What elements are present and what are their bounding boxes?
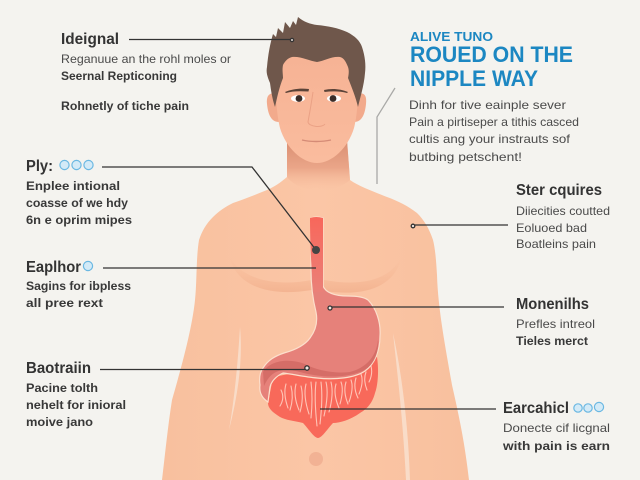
leader line	[103, 267, 316, 269]
body line 2: coasse of we hdy	[26, 196, 128, 210]
intro line 4: butbing petschent!	[409, 150, 522, 164]
callout: Baotraiin	[26, 360, 309, 429]
navel	[309, 452, 323, 466]
intro line 2: Pain a pirtiseper a tithis casced	[409, 115, 579, 129]
dot	[328, 306, 332, 310]
dot	[305, 366, 309, 370]
intro line 1: Dinh for tive eainple sever	[409, 98, 566, 112]
esophagus upper	[310, 217, 323, 292]
icon: blue ornament	[83, 261, 93, 271]
right chest	[324, 258, 401, 293]
stomach and esophagus	[260, 217, 380, 402]
neck shadow	[287, 140, 350, 190]
body: Reganuue an the rohl moles or	[61, 52, 231, 66]
title block	[409, 29, 579, 164]
callout: Ster cquires	[411, 182, 610, 251]
leader line	[415, 224, 508, 226]
dot	[411, 224, 415, 228]
heading: Ideignal	[61, 31, 119, 48]
grey bracket line	[377, 88, 395, 184]
leader line	[129, 38, 290, 40]
body: Pacine tolth	[26, 381, 98, 395]
heading: Ply:	[26, 158, 53, 175]
hair	[267, 17, 365, 107]
callout: Monenilhs	[328, 296, 595, 348]
bold line: Tieles merct	[516, 334, 588, 348]
body: Diiecities coutted	[516, 204, 610, 218]
torso and arms	[162, 140, 469, 480]
intestine folds	[280, 366, 372, 426]
heading: Monenilhs	[516, 296, 589, 313]
eyebrow: ALIVE TUNO	[410, 29, 493, 44]
note: Rohnetly of tiche pain	[61, 99, 189, 113]
dot	[312, 246, 320, 254]
icons: blue ornaments	[574, 402, 604, 412]
eyebrows	[285, 89, 309, 93]
ears	[267, 93, 279, 122]
face	[276, 50, 358, 163]
eyes	[291, 95, 341, 102]
body line 2: Eoluoed bad	[516, 221, 587, 235]
left arm crease	[229, 327, 241, 430]
head	[267, 17, 366, 163]
left chest	[230, 258, 312, 292]
body: Sagins for ibpless	[26, 279, 131, 293]
body: Donecte cif licgnal	[503, 421, 610, 435]
right arm crease	[393, 333, 410, 480]
body line 2: all pree rext	[26, 296, 103, 310]
body: Enplee intional	[26, 179, 120, 193]
callout: Ideignal	[61, 31, 294, 113]
leader line	[320, 408, 496, 410]
body: Prefles intreol	[516, 317, 595, 331]
dot	[290, 38, 294, 42]
body line 3: Boatleins pain	[516, 237, 596, 251]
leader line	[332, 306, 504, 308]
intestines	[268, 357, 378, 438]
heading: Baotraiin	[26, 360, 91, 377]
leader line	[100, 368, 305, 370]
intro line 3: cultis ang your instrauts sof	[409, 132, 571, 146]
body line 2: nehelt for inioral	[26, 398, 126, 412]
title line 1: ROUED ON THE	[410, 42, 573, 67]
heading: Earcahicl	[503, 400, 569, 417]
heading: Ster cquires	[516, 182, 602, 199]
bold line: with pain is earn	[502, 439, 610, 453]
title line 2: NIPPLE WAY	[410, 66, 538, 91]
stomach inner lining	[263, 340, 378, 386]
body line 3: moive jano	[26, 415, 93, 429]
nose	[308, 92, 325, 126]
body line 3: 6n e oprim mipes	[26, 213, 132, 227]
bold line: Seernal Repticoning	[61, 69, 177, 83]
heading: Eaplhor	[26, 259, 81, 276]
callout: Ply	[26, 158, 320, 254]
illustration: human figure	[162, 140, 469, 480]
callout: Eaplhor	[26, 259, 316, 310]
leader line	[102, 167, 316, 250]
mouth	[302, 140, 331, 142]
icons: blue ornaments	[60, 160, 93, 170]
callout: Earcahicl	[320, 400, 610, 453]
